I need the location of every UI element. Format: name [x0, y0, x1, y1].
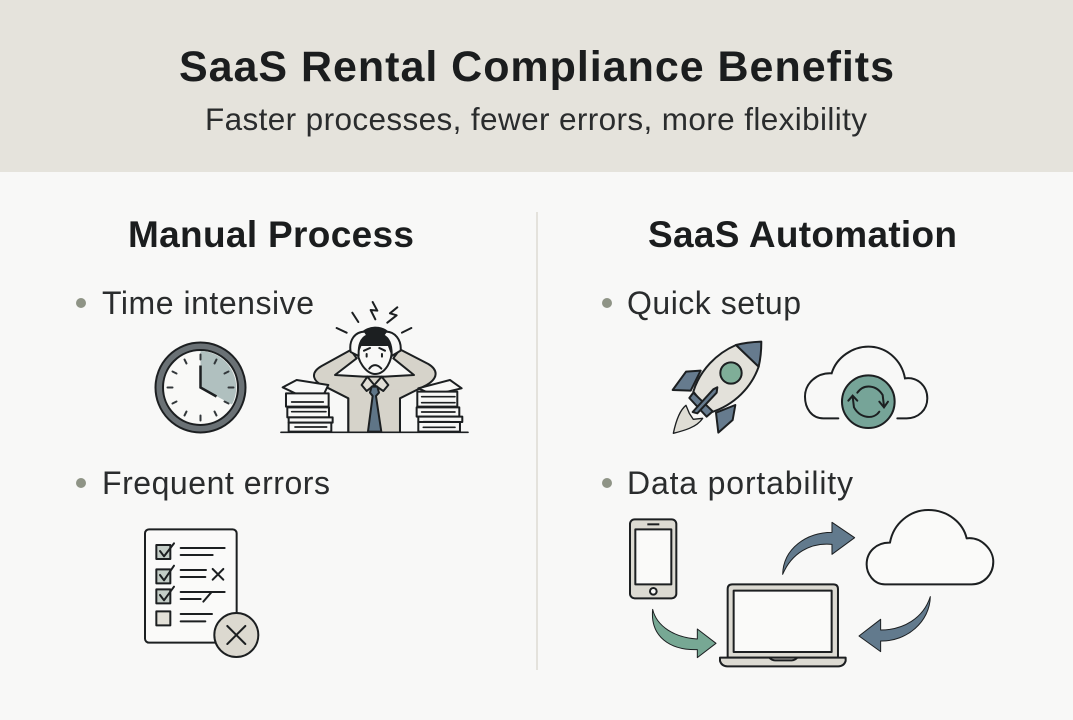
- heading: saas automation: SaaS Automation: [648, 214, 957, 255]
- tie: [368, 387, 381, 432]
- phone: [630, 519, 676, 598]
- title: SaaS Rental Compliance Benefits: [179, 43, 894, 91]
- panel: saas automation: [602, 214, 993, 666]
- icon: error checklist: [145, 529, 258, 657]
- stress marks: [337, 302, 411, 333]
- panel: manual process: [76, 214, 468, 657]
- icon: data portability flow: [630, 510, 993, 666]
- arrow: laptop to cloud: [783, 522, 855, 574]
- desk line: [281, 430, 468, 435]
- hands: [350, 332, 401, 356]
- laptop: [720, 584, 846, 666]
- icon: clock: [156, 342, 246, 432]
- bullet: time intensive: Time intensive: [102, 285, 314, 321]
- bullet: data portability: Data portability: [627, 465, 853, 501]
- right papers: [417, 380, 462, 432]
- bullet: quick setup: Quick setup: [627, 285, 801, 321]
- header band: [0, 0, 1073, 172]
- arrow: phone to laptop: [652, 609, 716, 658]
- icon: stressed man with paper stacks: [281, 302, 468, 432]
- collar: [362, 377, 388, 391]
- bullet: frequent errors: Frequent errors: [102, 465, 330, 501]
- head: [357, 345, 392, 374]
- cloud: [867, 510, 993, 584]
- icon: cloud sync: [805, 347, 927, 428]
- icon: rocket: [673, 342, 761, 433]
- subtitle: Faster processes, fewer errors, more flexibility: [205, 101, 867, 137]
- left papers: [283, 380, 333, 432]
- torso and arms: [314, 349, 436, 432]
- arrow: cloud to laptop: [859, 597, 930, 652]
- heading: manual process: Manual Process: [128, 214, 414, 255]
